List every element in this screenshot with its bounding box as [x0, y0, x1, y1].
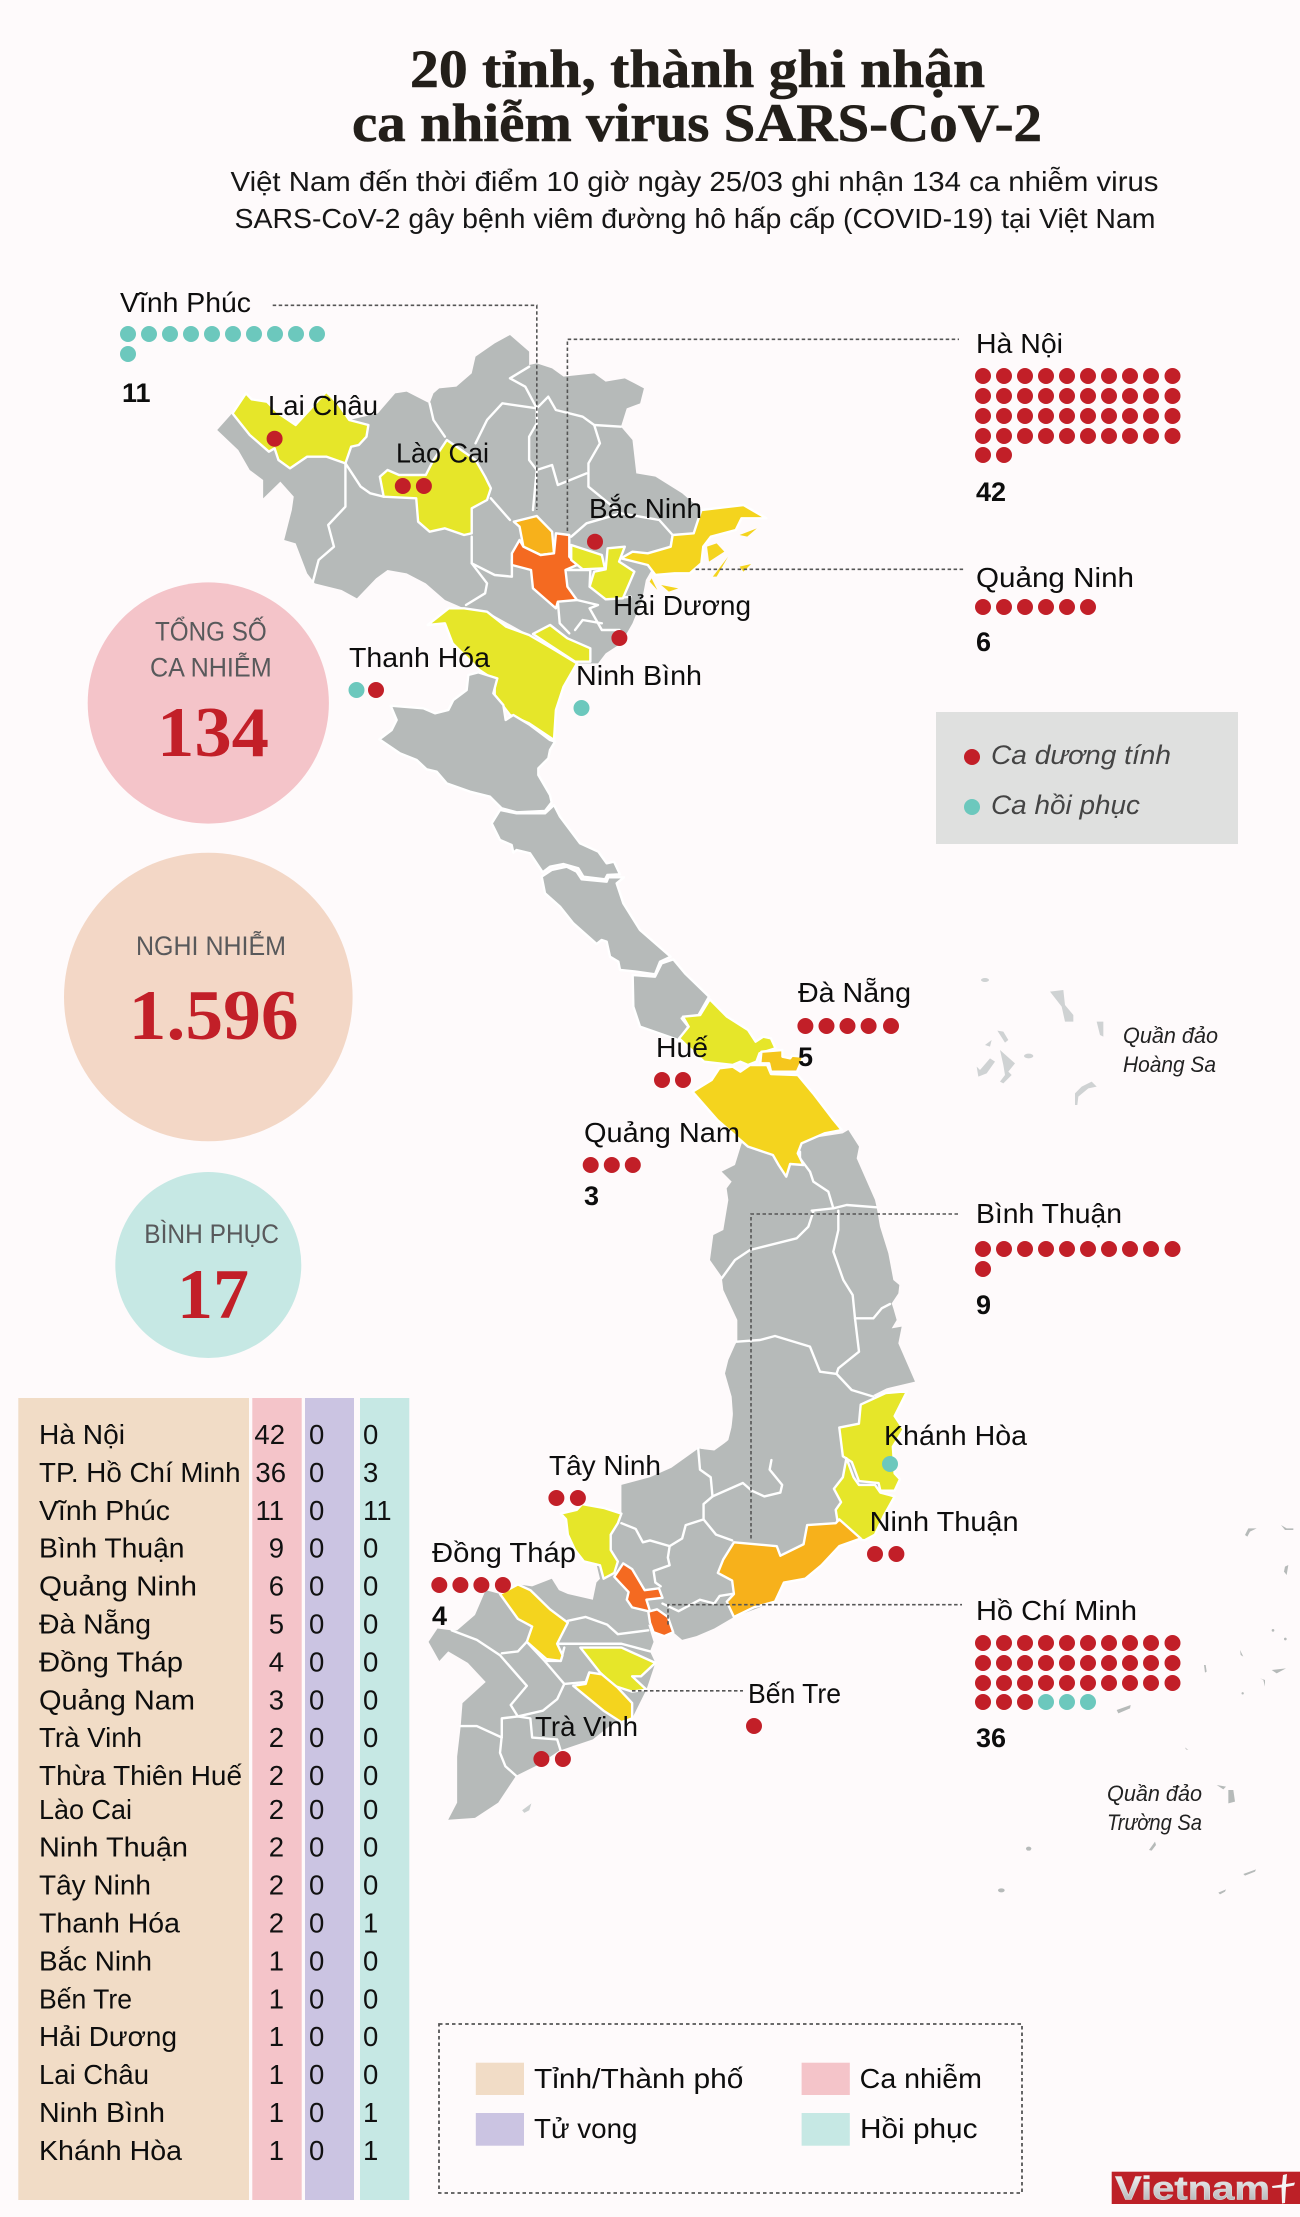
table column: deaths: 0 [309, 1684, 324, 1715]
label: Quảng Nam: 3 [584, 1181, 599, 1211]
table column: recovered: 0 [363, 1760, 378, 1791]
label: Hà Nội [975, 328, 1180, 507]
label: Đồng Tháp: 4 [432, 1601, 447, 1631]
table column: provinces: Thừa Thiên Huế [39, 1760, 242, 1791]
label: Vĩnh Phúc: 11 [122, 378, 151, 408]
table column: cases: 1 [269, 1983, 284, 2014]
stat circle: suspected: 1.596 [129, 977, 299, 1055]
label: Hồ Chí Minh: 36 [976, 1723, 1006, 1753]
province: Bến Tre [580, 1648, 655, 1692]
province: Khánh Hòa [839, 1391, 907, 1491]
map: northern region [217, 335, 766, 740]
province: Lai Châu [233, 392, 368, 468]
province: Lào Cai [380, 440, 491, 535]
map key: positive and recovered [936, 712, 1238, 844]
table column: provinces: Tây Ninh [39, 1870, 151, 1901]
province: Quảng Ninh [621, 505, 766, 592]
province: Ninh Bình [533, 625, 590, 662]
table column: provinces: Bắc Ninh [39, 1945, 152, 1976]
table column: cases: 9 [269, 1533, 284, 1564]
province: Đà Nẵng [760, 1050, 803, 1072]
table column: provinces: TP. Hồ Chí Minh [39, 1457, 240, 1488]
map key: positive and recovered: Ca dương tính [991, 740, 1171, 770]
table column: deaths: 0 [309, 1945, 324, 1976]
table column: deaths: 0 [309, 1760, 324, 1791]
stat circle: total cases: TỔNG SỐ [155, 614, 267, 646]
label: Tây Ninh: Tây Ninh [549, 1450, 661, 1481]
label: Đà Nẵng [797, 977, 911, 1072]
label: Quần đảo Hoàng Sa: Quần đảo [1123, 1023, 1218, 1048]
label: Quảng Ninh: Quảng Ninh [976, 562, 1134, 593]
label: Ninh Thuận: Ninh Thuận [870, 1506, 1019, 1537]
islands: Trường Sa [998, 1525, 1293, 1894]
table column: recovered: 0 [363, 2021, 378, 2052]
label: Đồng Tháp [431, 1537, 576, 1631]
table column: cases: 2 [269, 1908, 284, 1938]
table column: recovered: 1 [363, 2097, 378, 2128]
table column: provinces: Đồng Tháp [39, 1646, 183, 1677]
table column: cases: 1 [269, 2021, 284, 2052]
label: Quảng Nam: Quảng Nam [584, 1117, 740, 1148]
label: Quảng Ninh [975, 562, 1134, 657]
label: Thanh Hóa: Thanh Hóa [349, 642, 490, 673]
table column: recovered: 1 [363, 1908, 378, 1938]
label: Bến Tre: Bến Tre [748, 1678, 841, 1709]
table column: cases: 1 [269, 2059, 284, 2090]
label: Hồ Chí Minh: Hồ Chí Minh [976, 1595, 1137, 1626]
table column: deaths: 0 [309, 2059, 324, 2090]
table column: provinces: Bến Tre [39, 1983, 132, 2014]
table column: cases: 3 [269, 1684, 284, 1715]
label: Hà Nội: Hà Nội [976, 328, 1063, 359]
table column: deaths: 0 [309, 2097, 324, 2128]
table column: recovered: 0 [363, 1571, 378, 1602]
label: Lai Châu: Lai Châu [268, 390, 378, 421]
table column: cases: 11 [255, 1495, 284, 1526]
table column: deaths: 0 [309, 1908, 324, 1938]
table column: cases: 4 [269, 1646, 284, 1677]
islands: Hoàng Sa [977, 978, 1103, 1105]
legend: Hồi phục [860, 2113, 978, 2144]
table column: deaths: 0 [309, 1533, 324, 1564]
stat circle: total cases: CA NHIỄM [150, 652, 272, 683]
table column: provinces: Hà Nội [39, 1419, 125, 1450]
table column: cases: 2 [269, 1760, 284, 1791]
label: Khánh Hòa: Khánh Hòa [884, 1420, 1027, 1451]
table [18, 1398, 409, 2200]
table column: cases: 1 [269, 1945, 284, 1976]
table column: recovered: 0 [363, 1419, 378, 1450]
table column: deaths: 0 [309, 1983, 324, 2014]
table column: deaths: 0 [309, 1419, 324, 1450]
table column: provinces: Vĩnh Phúc [39, 1495, 170, 1526]
label: Lào Cai [395, 438, 489, 494]
label: Lai Châu [267, 390, 378, 447]
label: Bình Thuận: 9 [976, 1290, 991, 1320]
leader lines [273, 305, 965, 1691]
table column: recovered [363, 1419, 392, 2166]
stat circle: total cases [88, 582, 329, 824]
label: Lào Cai: Lào Cai [396, 438, 489, 469]
province: Thừa Thiên Huế [679, 999, 776, 1065]
table column: provinces: Trà Vinh [39, 1722, 142, 1753]
table column: provinces: Quảng Ninh [39, 1571, 197, 1602]
province: Đồng Tháp [500, 1584, 568, 1661]
table column: recovered: 0 [363, 1646, 378, 1677]
table column: recovered: 1 [363, 2135, 378, 2166]
table column backgrounds [18, 1398, 409, 2200]
table column: provinces: Ninh Bình [39, 2097, 165, 2128]
label: Trà Vinh: Trà Vinh [535, 1711, 638, 1742]
table column: cases: 36 [255, 1457, 286, 1488]
map: southern region [429, 1387, 907, 1820]
table column: deaths: 0 [309, 1495, 324, 1526]
label: Vĩnh Phúc: Vĩnh Phúc [120, 287, 251, 318]
province: Hồ Chí Minh [614, 1563, 673, 1636]
province: Hải Dương [590, 547, 634, 599]
label: Bắc Ninh [587, 493, 702, 550]
label: Ninh Thuận [867, 1506, 1019, 1562]
table column: cases: 2 [269, 1794, 284, 1825]
table column: deaths: 0 [309, 1722, 324, 1753]
subtitle: SARS-CoV-2 gây bệnh viêm đường hô hấp cấp (COVID-19) tại Việt Nam [234, 203, 1156, 234]
label: Ninh Bình: Ninh Bình [576, 660, 702, 691]
stat circle: recovered: 17 [177, 1256, 249, 1334]
table column: recovered: 0 [363, 2059, 378, 2090]
stat circle: total cases: 134 [157, 694, 269, 772]
table column: recovered: 0 [363, 1722, 378, 1753]
province: Ninh Thuận [834, 1458, 895, 1540]
label: Quần đảo Trường Sa [1107, 1781, 1202, 1835]
stat circle: suspected: NGHI NHIỄM [136, 930, 286, 961]
table column: deaths: 0 [309, 1646, 324, 1677]
table column: recovered: 0 [363, 1794, 378, 1825]
label: Hải Dương: Hải Dương [613, 590, 751, 621]
label: Quảng Nam [583, 1117, 740, 1211]
table column: recovered: 3 [363, 1457, 378, 1488]
province: Tây Ninh [561, 1504, 621, 1579]
table column: provinces [39, 1419, 242, 2166]
legend: Tỉnh/Thành phố [534, 2063, 744, 2094]
stat circle: suspected [64, 853, 353, 1141]
label: Bình Thuận [975, 1198, 1180, 1320]
table column: recovered: 11 [363, 1495, 392, 1526]
label: Đà Nẵng: Đà Nẵng [798, 977, 911, 1008]
table column: cases: 2 [269, 1870, 284, 1901]
title: ca nhiễm virus SARS-CoV-2 [352, 93, 1042, 153]
label: Huế: Huế [656, 1032, 708, 1063]
label: Quần đảo Trường Sa: Quần đảo [1107, 1781, 1202, 1806]
title: 20 tỉnh, thành ghi nhận [410, 39, 985, 99]
table column: provinces: Bình Thuận [39, 1533, 184, 1564]
label: Bắc Ninh: Bắc Ninh [589, 493, 702, 524]
map: Huế, Đà Nẵng, Quảng Nam [679, 999, 842, 1177]
table column: provinces: Hải Dương [39, 2021, 177, 2052]
province: Vĩnh Phúc [514, 516, 554, 555]
province: Trà Vinh [573, 1672, 632, 1722]
table column: recovered: 0 [363, 1608, 378, 1640]
label: Vĩnh Phúc [120, 287, 325, 408]
table column: recovered: 0 [363, 1945, 378, 1976]
table column: recovered: 0 [363, 1832, 378, 1863]
province: Quảng Nam [693, 1065, 842, 1177]
label: Tây Ninh [548, 1450, 661, 1506]
label: Bến Tre [746, 1678, 841, 1734]
subtitle [230, 166, 1158, 234]
table column: provinces: Lai Châu [39, 2059, 149, 2090]
label: Thanh Hóa [348, 642, 490, 698]
map: Vietnam provinces [217, 335, 915, 1820]
logo: Vietnam+ [1112, 2169, 1300, 2206]
table column: deaths: 0 [309, 1571, 324, 1602]
table column: cases: 2 [269, 1722, 284, 1753]
table column: cases: 2 [269, 1832, 284, 1863]
map: north central coast [379, 672, 709, 1040]
province: Hà Nội [512, 533, 577, 608]
stat circle: recovered [115, 1172, 301, 1358]
label: Quần đảo Hoàng Sa: Hoàng Sa [1123, 1052, 1216, 1077]
table column: provinces: Thanh Hóa [39, 1908, 180, 1938]
table column: cases: 42 [254, 1419, 285, 1450]
label: Hồ Chí Minh [975, 1595, 1180, 1753]
table column: recovered: 0 [363, 1983, 378, 2014]
table column: cases: 1 [269, 2097, 284, 2128]
province: Bình Thuận [718, 1519, 861, 1617]
table column: deaths [309, 1419, 324, 2166]
table column: recovered: 0 [363, 1870, 378, 1901]
map: central highlands and coast [698, 1130, 915, 1508]
province: Thanh Hóa [428, 608, 577, 740]
table column: recovered: 0 [363, 1684, 378, 1715]
table column: provinces: Lào Cai [39, 1794, 132, 1825]
legend: Tử vong [534, 2113, 638, 2144]
map key: positive and recovered: Ca hồi phục [991, 790, 1141, 820]
province: Bắc Ninh [571, 545, 605, 569]
table column: provinces: Quảng Nam [39, 1684, 195, 1715]
legend: Ca nhiễm [860, 2063, 982, 2094]
title [352, 39, 1042, 153]
table column: provinces: Đà Nẵng [39, 1608, 151, 1640]
table column: deaths: 0 [309, 1794, 324, 1825]
table column: deaths: 0 [309, 1608, 324, 1640]
label: Quần đảo Trường Sa: Trường Sa [1107, 1810, 1202, 1835]
subtitle: Việt Nam đến thời điểm 10 giờ ngày 25/03 ghi nhận 134 ca nhiễm virus [230, 166, 1158, 197]
table column: deaths: 0 [309, 1457, 324, 1488]
table column: deaths: 0 [309, 1832, 324, 1863]
label: Bình Thuận: Bình Thuận [976, 1198, 1122, 1229]
table column: cases: 5 [269, 1608, 284, 1640]
table column: cases [254, 1419, 286, 2166]
table column: provinces: Ninh Thuận [39, 1832, 188, 1863]
label: Quảng Ninh: 6 [976, 627, 991, 657]
table column: cases: 1 [269, 2135, 284, 2166]
table column: cases: 6 [269, 1571, 284, 1602]
label: Đà Nẵng: 5 [798, 1042, 813, 1072]
label: Quần đảo Hoàng Sa [1123, 1023, 1218, 1077]
label: Hải Dương [611, 590, 751, 646]
label: Khánh Hòa [882, 1420, 1027, 1472]
label: Đồng Tháp: Đồng Tháp [432, 1537, 576, 1568]
label: Ninh Bình [574, 660, 702, 716]
table column: recovered: 0 [363, 1533, 378, 1564]
table column: deaths: 0 [309, 1870, 324, 1901]
stat circle: recovered: BÌNH PHỤC [144, 1219, 279, 1249]
label: Hà Nội: 42 [976, 477, 1006, 507]
label: Trà Vinh [533, 1711, 638, 1767]
legend [439, 2024, 1022, 2193]
logo: Vietnam+: Vietnam [1115, 2169, 1270, 2206]
label: Huế [654, 1032, 708, 1088]
table column: provinces: Khánh Hòa [39, 2135, 182, 2166]
table column: deaths: 0 [309, 2135, 324, 2166]
table column: deaths: 0 [309, 2021, 324, 2052]
